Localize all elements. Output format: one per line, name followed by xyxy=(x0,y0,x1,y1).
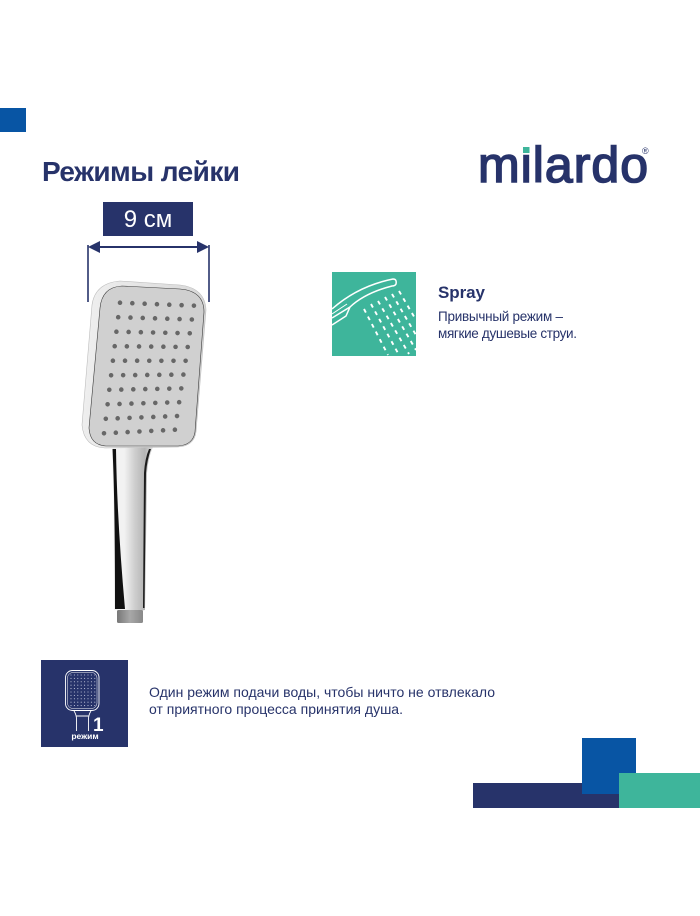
spray mode heading: Spray xyxy=(438,283,486,302)
spray mode description: Привычный режим – xyxy=(438,309,563,324)
head face xyxy=(89,286,204,446)
handle xyxy=(112,447,153,612)
width label: 9 cm: 9 см xyxy=(124,206,172,233)
description text xyxy=(149,684,495,717)
logo: milardo: milardo xyxy=(478,137,648,193)
description text: Один режим подачи воды, чтобы ничто не отвлекало xyxy=(149,684,495,700)
title: Режимы лейки xyxy=(42,156,240,187)
decorative corner blocks xyxy=(473,738,700,808)
logo: milardo: ® xyxy=(642,146,649,156)
dimension arrow xyxy=(88,241,209,302)
icon: one mode badge xyxy=(41,660,128,747)
corner accent square xyxy=(0,108,26,132)
description text: от приятного процесса принятия душа. xyxy=(149,701,403,717)
spray nozzles xyxy=(104,303,194,433)
spray mode description: мягкие душевые струи. xyxy=(438,326,577,341)
icon: one mode badge: режим xyxy=(71,731,99,741)
icon: one mode badge: 1 xyxy=(93,715,104,736)
icon: spray mode xyxy=(332,272,416,356)
threaded connector xyxy=(117,610,143,623)
spray mode description xyxy=(438,309,577,341)
shower head product photo xyxy=(82,281,206,623)
width label: 9 cm xyxy=(103,202,193,236)
head body xyxy=(82,281,206,448)
